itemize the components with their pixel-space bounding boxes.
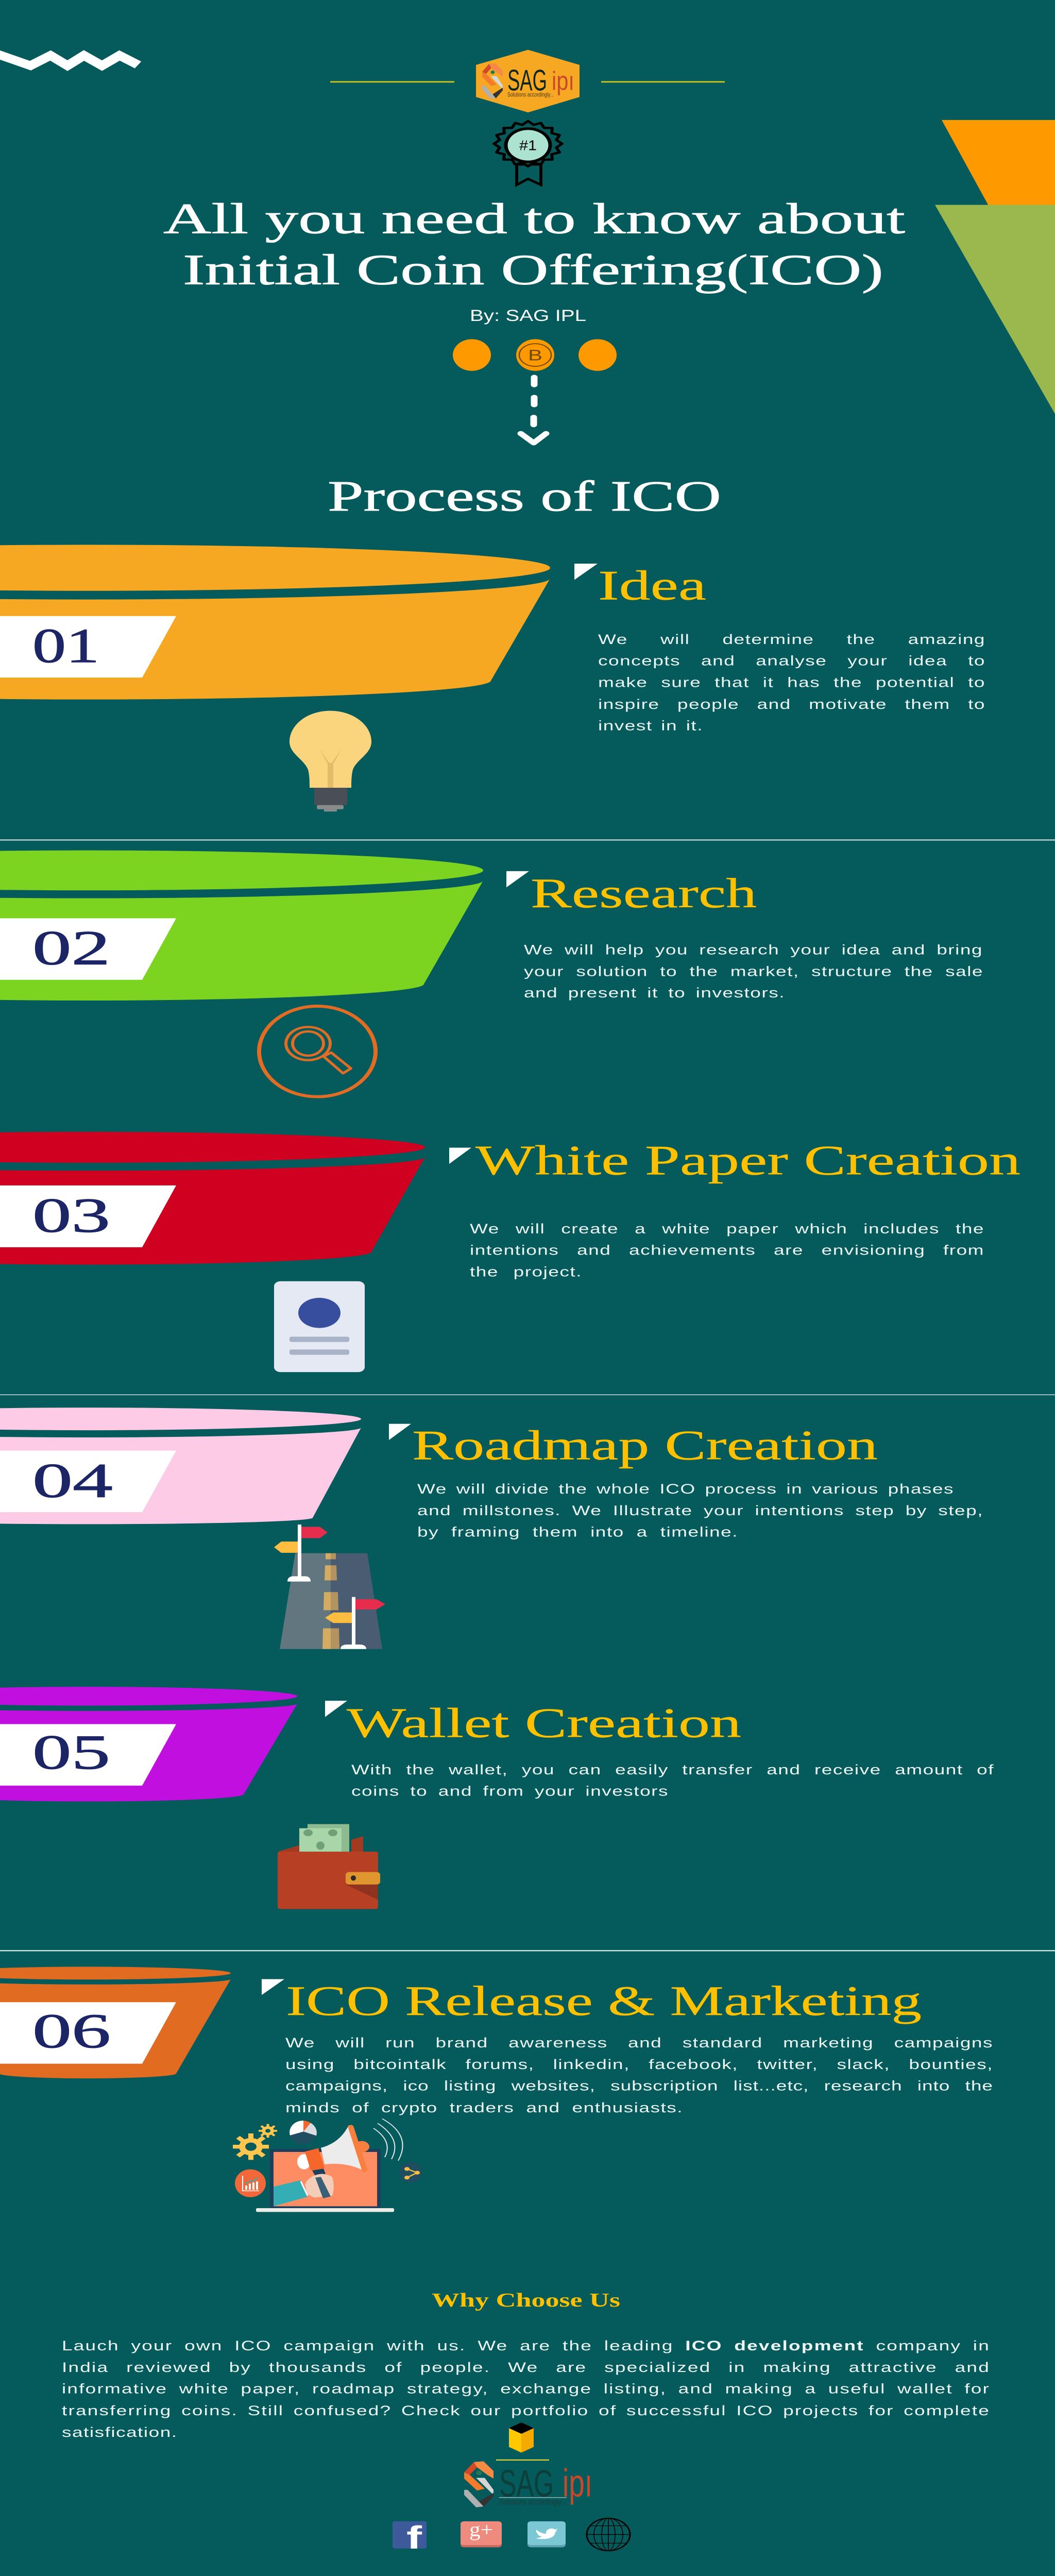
header logo with side rules: SAG (507, 64, 547, 97)
icon: number one medal: #1 (519, 138, 537, 154)
funnel 02 (0, 851, 483, 1001)
header logo with side rules (330, 50, 725, 112)
text: white paper description: We will create a white paper which includes the (470, 1221, 984, 1236)
text: research description: your solution to the market, structure the sale (524, 963, 983, 979)
text: roadmap description: and millstones. We Illustrate your intentions step by step, (417, 1503, 983, 1518)
heading: process of ICO: Process of ICO (328, 472, 721, 520)
heading: roadmap creation: Roadmap Creation (412, 1422, 878, 1469)
text: why choose us paragraph: Lauch your own ICO campaign with us. We are the leading ICO development company in (62, 2338, 990, 2353)
funnel 01: 01 (32, 618, 99, 673)
icon: facebook: f (406, 2520, 422, 2555)
sound waves (373, 2119, 403, 2161)
icon: google plus: g+ (469, 2518, 493, 2540)
footer logo (464, 2461, 592, 2507)
hand and grip (305, 2174, 334, 2198)
panel: step 05 wallet creation (0, 1687, 998, 1909)
text: roadmap description: by framing them into a timeline. (417, 1524, 738, 1540)
funnel 06: 06 (32, 2004, 111, 2058)
icon: wallet with cash (278, 1824, 380, 1909)
icon: twitter (528, 2521, 566, 2547)
funnel 05: 05 (32, 1725, 110, 1780)
panel: step 03 white paper creation (0, 1132, 1020, 1372)
panel: step 02 research (0, 851, 988, 1097)
icon: facebook (393, 2520, 427, 2555)
title: All you need to know about (163, 194, 905, 243)
sleeve (274, 2180, 308, 2206)
heading: ICO release and marketing: ICO Release & Marketing (286, 1978, 922, 2024)
funnel 05 (0, 1687, 297, 1802)
icon: number one medal (494, 121, 562, 185)
title (163, 194, 905, 294)
panel: step 06 ICO release and marketing (0, 1967, 998, 2212)
laptop (270, 2149, 381, 2209)
text: marketing description: minds of crypto traders and enthusiasts. (285, 2100, 683, 2115)
icon: globe (587, 2518, 630, 2551)
text: idea description: invest in it. (598, 718, 703, 733)
text: why choose us paragraph: informative white paper, roadmap strategy, exchange listing, and making a useful wallet for (62, 2381, 990, 2397)
footer logo: Solutions accordingly... (499, 2498, 567, 2507)
text: roadmap description (417, 1478, 989, 1544)
text: why choose us paragraph: India reviewed by thousands of people. We are specialized in making attractive and (62, 2360, 990, 2375)
funnel 01 (0, 545, 550, 700)
icon: coins (453, 339, 617, 371)
panel: step 04 roadmap creation (0, 1408, 989, 1649)
footer logo: SAG (499, 2462, 554, 2504)
text: research description (524, 939, 988, 1005)
share badge (399, 2162, 422, 2182)
text: marketing description: We will run brand awareness and standard marketing campaigns (285, 2035, 993, 2050)
icon: coins: B (528, 347, 542, 364)
title: Initial Coin Offering(ICO) (183, 245, 883, 294)
decorative orange and green corner shapes (935, 120, 1055, 414)
icon: yellow box (509, 2422, 534, 2453)
text: idea description (598, 629, 990, 738)
footer logo: ipı (563, 2461, 592, 2505)
heading: wallet creation: Wallet Creation (347, 1700, 741, 1747)
icon: document card (274, 1281, 365, 1372)
text: research description: We will help you research your idea and bring (524, 942, 983, 958)
icon: road with signposts (274, 1524, 385, 1649)
text: idea description: We will determine the amazing (598, 632, 985, 647)
header logo with side rules: Solutions accordingly... (507, 91, 554, 98)
icon: google plus (461, 2518, 502, 2547)
funnel 02: 02 (32, 920, 110, 975)
funnel 04: 04 (32, 1453, 113, 1508)
text: white paper description: intentions and achievements are envisioning from (470, 1243, 984, 1258)
text: wallet description (351, 1759, 998, 1804)
text: wallet description: With the wallet, you can easily transfer and receive amount of (351, 1762, 994, 1777)
text: why choose us paragraph: satisfication. (62, 2424, 178, 2439)
panel: step 01 idea (0, 545, 990, 811)
heading: research: Research (531, 870, 757, 917)
funnel 06 (0, 1967, 231, 2078)
chart badge (235, 2170, 266, 2197)
text: marketing description: using bitcointalk forums, linkedin, facebook, twitter, slack, bounties, (285, 2057, 993, 2072)
heading: white paper creation: White Paper Creation (475, 1138, 1020, 1184)
icon: magnifier in circle (259, 1006, 376, 1097)
megaphone (354, 2141, 369, 2153)
heading: why choose us: Why Choose Us (432, 2289, 620, 2311)
text: idea description: inspire people and motivate them to (598, 696, 985, 711)
text: marketing description: campaigns, ico listing websites, subscription list...etc, research into the (285, 2078, 993, 2094)
icon: megaphone on laptop (233, 2119, 422, 2212)
byline: By: SAG IPL (470, 307, 586, 325)
icon: white zigzag (0, 54, 138, 65)
funnel 04 (0, 1408, 361, 1524)
text: marketing description (285, 2032, 998, 2121)
funnel 03 (0, 1132, 425, 1265)
pie chart (290, 2121, 317, 2144)
header logo with side rules: ipı (552, 65, 574, 95)
social icons (393, 2518, 630, 2555)
heading: idea: Idea (598, 563, 706, 609)
text: why choose us paragraph (62, 2335, 995, 2446)
text: white paper description (470, 1218, 990, 1284)
text: white paper description: the project. (470, 1264, 582, 1279)
text: why choose us paragraph: transferring coins. Still confused? Check our portfolio of successful ICO projects for complete (62, 2403, 990, 2418)
text: roadmap description: We will divide the whole ICO process in various phases (417, 1481, 954, 1497)
icon: light bulb (290, 711, 371, 811)
text: idea description: concepts and analyse your idea to (598, 653, 985, 669)
gears (233, 2124, 277, 2160)
text: idea description: make sure that it has the potential to (598, 675, 985, 690)
text: research description: and present it to investors. (524, 985, 785, 1001)
funnel 03: 03 (32, 1188, 110, 1243)
arrow: dashed down arrow (521, 377, 546, 443)
text: wallet description: coins to and from your investors (351, 1784, 669, 1799)
